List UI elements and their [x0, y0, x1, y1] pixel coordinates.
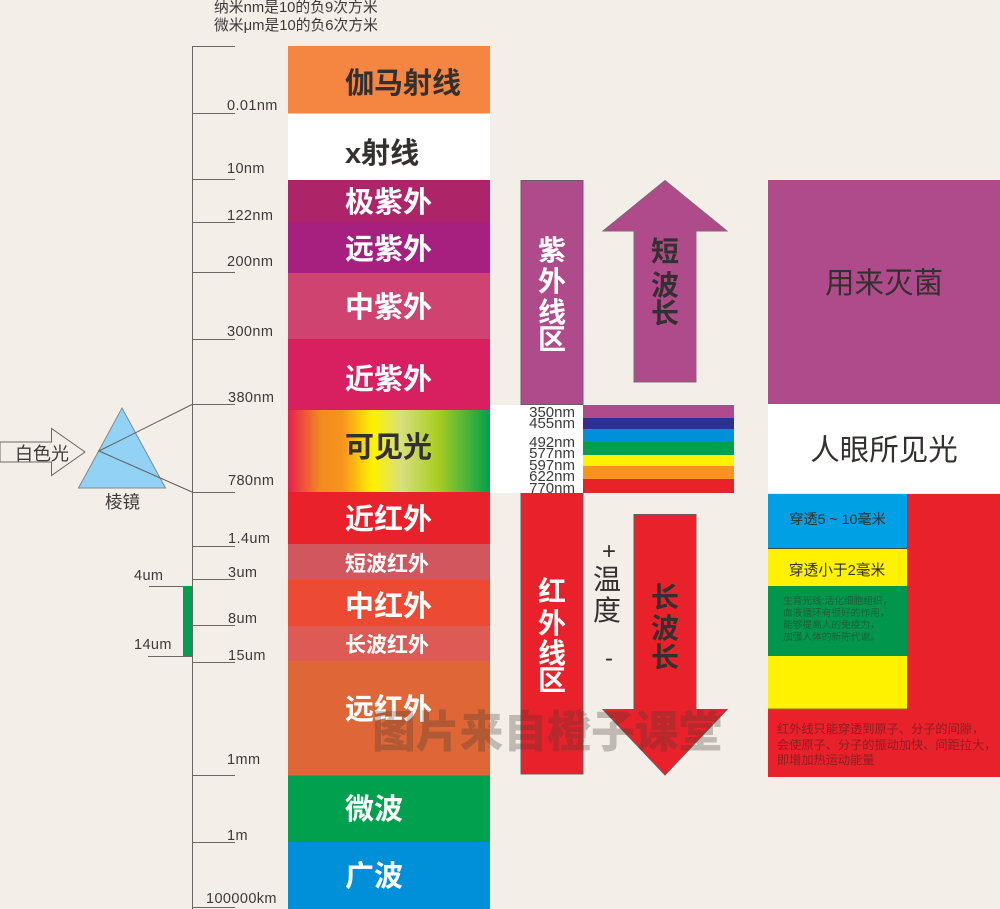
spectrum labels: 短波红外	[345, 553, 429, 576]
spectrum labels: 近紫外	[345, 363, 432, 396]
arrow: long wavelength	[603, 514, 727, 775]
spectrum labels: 微波	[345, 793, 403, 826]
panel: infrared effects: 能够提高人的免疫力，	[783, 618, 880, 631]
unit note	[214, 0, 378, 34]
scale labels: 122nm	[227, 208, 273, 224]
scale labels: 1mm	[227, 752, 260, 768]
panel: ultraviolet zone: 紫	[538, 235, 566, 266]
spectrum labels: 远紫外	[345, 233, 432, 266]
scale labels: 1m	[227, 828, 248, 844]
spectrum labels: 极紫外	[345, 186, 432, 219]
prism: 棱镜	[105, 492, 140, 512]
scale labels: 1.4um	[228, 531, 270, 547]
panel: infrared zone: 外	[538, 608, 566, 639]
scale labels	[134, 98, 278, 907]
panel: visible wavelengths: 455nm	[529, 415, 575, 432]
arrow: long wavelength: 波	[651, 613, 679, 644]
panel: visible to eye	[768, 404, 1000, 493]
scale labels: 0.01nm	[227, 98, 278, 114]
scale labels: 14um	[134, 637, 172, 653]
scale labels: 300nm	[227, 324, 273, 340]
panel: infrared zone: 红	[538, 576, 566, 607]
panel: infrared effects	[768, 494, 1000, 777]
spectrum labels: 长波红外	[345, 634, 429, 657]
scale labels: 3um	[228, 565, 257, 581]
temperature label	[593, 538, 621, 672]
panel: ultraviolet zone: 线	[538, 297, 566, 328]
scale labels: 200nm	[227, 254, 273, 270]
spectrum labels: 伽马射线	[345, 67, 461, 100]
scale labels: 780nm	[228, 473, 274, 489]
panel: ultraviolet zone: 区	[538, 324, 566, 355]
scale labels: 100000km	[206, 891, 277, 907]
panel: visible to eye: 人眼所见光	[810, 434, 958, 467]
temperature label: 度	[593, 595, 621, 626]
panel: sterilization: 用来灭菌	[825, 267, 943, 300]
panel: visible wavelengths	[490, 404, 734, 497]
watermark: 图片来自橙子课堂	[372, 696, 722, 760]
panel: ultraviolet zone: 外	[538, 266, 566, 297]
panel: infrared effects: 红外线只能穿透到原子、分子的间隙，	[777, 721, 984, 736]
panel: infrared zone: 区	[538, 665, 566, 696]
panel: infrared effects: 即增加热运动能量	[777, 752, 874, 767]
panel: visible wavelengths: 577nm	[529, 445, 575, 462]
panel: visible wavelengths: 770nm	[529, 480, 575, 497]
panel: visible wavelengths: 597nm	[529, 457, 575, 474]
scale labels: 4um	[134, 568, 163, 584]
arrow: short wavelength: 长	[651, 298, 679, 329]
scale labels: 380nm	[228, 390, 274, 406]
panel: infrared zone: 线	[538, 638, 566, 669]
spectrum labels: 近红外	[345, 503, 432, 536]
unit note: 微米μm是10的负6次方米	[214, 17, 378, 34]
scale labels: 15um	[228, 648, 266, 664]
panel: infrared effects: 穿透5 ~ 10毫米	[789, 511, 886, 528]
panel: infrared effects: 穿透小于2毫米	[789, 561, 885, 579]
panel: infrared effects: 血液循环有很好的作用，	[783, 606, 890, 619]
arrow: short wavelength: 短	[651, 236, 679, 267]
prism	[78, 404, 192, 512]
panel: visible wavelengths: 622nm	[529, 468, 575, 485]
panel: infrared zone	[521, 493, 583, 774]
spectrum labels: 中紫外	[345, 291, 432, 324]
wavelength scale axis	[192, 46, 235, 909]
spectrum labels	[345, 67, 461, 893]
panel: infrared effects: 加强人体的新陈代谢。	[783, 630, 880, 643]
spectrum labels: 广波	[345, 860, 403, 893]
unit note: 纳米nm是10的负9次方米	[214, 0, 378, 16]
arrow: short wavelength	[603, 180, 727, 382]
scale labels: 8um	[228, 611, 257, 627]
panel: ultraviolet zone	[521, 180, 583, 404]
temperature label: -	[605, 645, 613, 672]
panel: sterilization	[768, 180, 1000, 404]
panel: visible wavelengths: 350nm	[529, 404, 575, 421]
spectrum labels: 远红外	[345, 693, 432, 726]
arrow: short wavelength: 波	[651, 270, 679, 301]
arrow: white light	[0, 428, 85, 476]
spectrum labels: 中红外	[345, 590, 432, 623]
temperature label: 温	[593, 564, 621, 595]
spectrum column	[288, 46, 490, 909]
scale labels: 10nm	[227, 161, 265, 177]
arrow: long wavelength: 长	[651, 642, 679, 673]
arrow: white light: 白色光	[15, 444, 69, 464]
panel: infrared effects: 生育光线:活化细胞组织，	[783, 594, 892, 607]
panel: infrared effects: 会使原子、分子的振动加快、间距拉大，	[777, 737, 996, 752]
spectrum labels: 可见光	[345, 431, 432, 464]
temperature label: +	[602, 538, 616, 565]
range marker 4um to 14um	[148, 586, 192, 656]
arrow: long wavelength: 长	[651, 582, 679, 613]
spectrum labels: x射线	[345, 137, 419, 170]
panel: visible wavelengths: 492nm	[529, 434, 575, 451]
